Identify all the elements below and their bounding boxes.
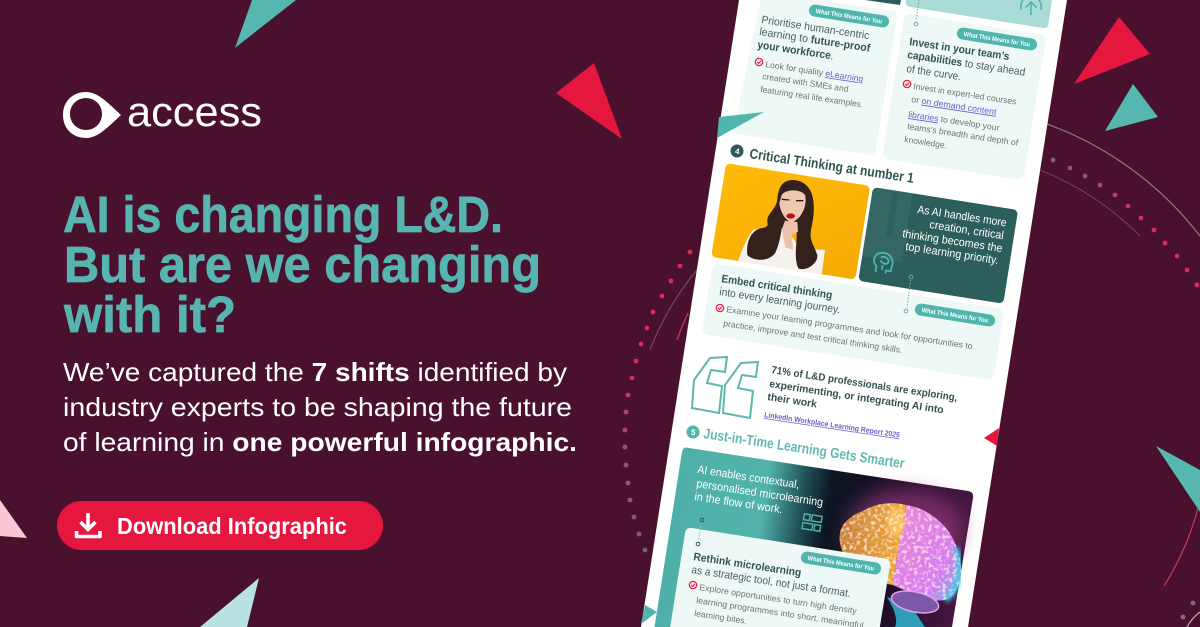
connector bbox=[914, 0, 919, 26]
connector bbox=[904, 275, 913, 313]
statement text: top learning priority. bbox=[905, 241, 999, 267]
statement text: creation, critical bbox=[929, 219, 1005, 242]
section heading 4: Critical Thinking at number 1 bbox=[749, 145, 915, 186]
headline: with it? bbox=[63, 286, 236, 343]
shirt bbox=[738, 223, 825, 275]
panel body: libraries to develop your bbox=[908, 109, 1000, 133]
panel body: practice, improve and test critical thinking skills. bbox=[723, 318, 903, 355]
button label: Download Infographic bbox=[117, 513, 347, 539]
pill bbox=[956, 27, 1038, 51]
card text bbox=[694, 464, 824, 516]
icon: check bbox=[689, 581, 697, 589]
quote block bbox=[692, 357, 958, 439]
triangle: top teal bbox=[235, 0, 296, 48]
icon: download bbox=[76, 513, 100, 536]
panel heading: Prioritise human-centric bbox=[761, 14, 871, 42]
panel body: or on demand content bbox=[911, 94, 998, 117]
panel body: created with SMEs and bbox=[762, 71, 849, 94]
card text: personalised microlearning bbox=[696, 478, 824, 509]
panel heading: as a strategic tool, not just a format. bbox=[691, 564, 852, 600]
triangle: red on page edge bbox=[984, 428, 999, 446]
quote text: 71% of L&D professionals are exploring, bbox=[771, 364, 958, 404]
panel: invest in capabilities bbox=[882, 0, 1046, 181]
triangle: red centre bbox=[556, 63, 622, 139]
triangle: teal right bbox=[1156, 446, 1200, 512]
pill bbox=[914, 303, 996, 327]
panel heading: Embed critical thinking bbox=[721, 273, 833, 302]
card text: AI enables contextual, bbox=[697, 464, 800, 491]
panel heading bbox=[691, 551, 852, 600]
headline: AI is changing L&D. bbox=[63, 186, 503, 243]
panel heading: into every learning journey. bbox=[719, 286, 841, 316]
intro paragraph: We’ve captured the 7 shifts identified by bbox=[63, 357, 567, 387]
panel body: Invest in expert-led courses bbox=[913, 81, 1017, 107]
icon: quote marks bbox=[692, 357, 758, 418]
headline bbox=[63, 186, 541, 343]
statement text bbox=[902, 204, 1007, 267]
triangle: teal on page bbox=[717, 112, 764, 138]
download button bbox=[57, 501, 383, 550]
icon: brain head bbox=[872, 252, 894, 274]
connector bbox=[696, 518, 704, 546]
panel heading: capabilities to stay ahead bbox=[907, 49, 1026, 79]
lips bbox=[786, 213, 795, 219]
intro paragraph bbox=[63, 357, 577, 457]
icon: check bbox=[903, 80, 911, 88]
decorative dot ring bbox=[623, 158, 1199, 619]
eyes bbox=[782, 199, 803, 201]
face bbox=[779, 190, 806, 222]
pill: What This Means for You bbox=[807, 555, 875, 573]
panel heading: of the curve. bbox=[906, 63, 962, 83]
pill bbox=[800, 551, 882, 575]
logo mark bbox=[63, 92, 121, 138]
panel body: Explore opportunities to turn high density bbox=[699, 582, 858, 616]
icon: check bbox=[716, 304, 724, 312]
pill: What This Means for You bbox=[921, 307, 989, 325]
infographic preview bbox=[641, 0, 1067, 627]
statement text: thinking becomes the bbox=[902, 228, 1003, 255]
quote text: their work bbox=[767, 391, 818, 410]
icon: upload arrow bbox=[1021, 0, 1041, 15]
panel body: Examine your learning programmes and look for opportunities to bbox=[726, 304, 974, 351]
intro paragraph: industry experts to be shaping the future bbox=[63, 392, 572, 422]
triangle: pink left bbox=[0, 500, 27, 538]
panel heading: Invest in your team’s bbox=[909, 36, 1010, 63]
section heading 5: 5 bbox=[690, 428, 697, 437]
teal card top bbox=[906, 0, 1052, 28]
section heading 4: 4 bbox=[734, 147, 741, 156]
panel body bbox=[904, 81, 1020, 150]
panel body bbox=[760, 59, 864, 110]
brain illustration bbox=[840, 503, 961, 627]
glow bbox=[847, 488, 963, 572]
decorative arcs bbox=[650, 124, 1200, 627]
panel body: Look for quality eLearning bbox=[765, 59, 864, 84]
icon: grid bbox=[802, 514, 822, 531]
panel heading bbox=[719, 273, 841, 316]
panel: embed critical thinking bbox=[702, 263, 1004, 380]
triangle: teal top right bbox=[1105, 84, 1158, 131]
logo wordmark: access bbox=[127, 88, 262, 135]
hair bbox=[747, 180, 817, 269]
photo: thinking woman bbox=[711, 163, 870, 280]
dark card top bbox=[865, 0, 901, 5]
section heading 5: Just-in-Time Learning Gets Smarter bbox=[702, 426, 906, 472]
triangle: teal bottom of page bbox=[641, 605, 657, 624]
panel body bbox=[694, 582, 864, 627]
panel heading bbox=[906, 36, 1026, 83]
pill bbox=[808, 4, 890, 28]
panel body: learning bites. bbox=[694, 608, 748, 626]
icon: check bbox=[755, 58, 763, 66]
triangle: pale teal bottom bbox=[200, 578, 259, 627]
panel: microlearning image card bbox=[654, 448, 973, 627]
panel: rethink microlearning bbox=[670, 518, 890, 627]
panel body: teams's breadth and depth of bbox=[907, 121, 1020, 148]
panel body: knowledge. bbox=[904, 134, 948, 150]
panel heading: Rethink microlearning bbox=[693, 551, 802, 579]
logo bbox=[63, 88, 262, 138]
triangle: red top right bbox=[1074, 17, 1150, 84]
card text: in the flow of work. bbox=[694, 491, 783, 516]
panel heading bbox=[757, 14, 871, 62]
statement text: As AI handles more bbox=[917, 204, 1007, 229]
page sheet bbox=[641, 0, 1067, 627]
headline: But are we changing bbox=[64, 236, 541, 293]
intro paragraph: of learning in one powerful infographic. bbox=[63, 427, 577, 457]
panel heading: learning to future-proof bbox=[759, 26, 871, 55]
hand and neck bbox=[782, 221, 798, 250]
section heading 5 bbox=[686, 426, 906, 472]
panel body: featuring real life examples. bbox=[760, 84, 864, 110]
quote text: experimenting, or integrating AI into bbox=[769, 378, 944, 416]
pill: What This Means for You bbox=[815, 8, 883, 26]
panel: human-centric learning bbox=[734, 0, 897, 155]
pill: What This Means for You bbox=[963, 31, 1031, 49]
panel: critical thinking statement bbox=[858, 187, 1018, 304]
panel heading: your workforce. bbox=[757, 39, 834, 62]
quote source: LinkedIn Workplace Learning Report 2025 bbox=[764, 410, 901, 439]
